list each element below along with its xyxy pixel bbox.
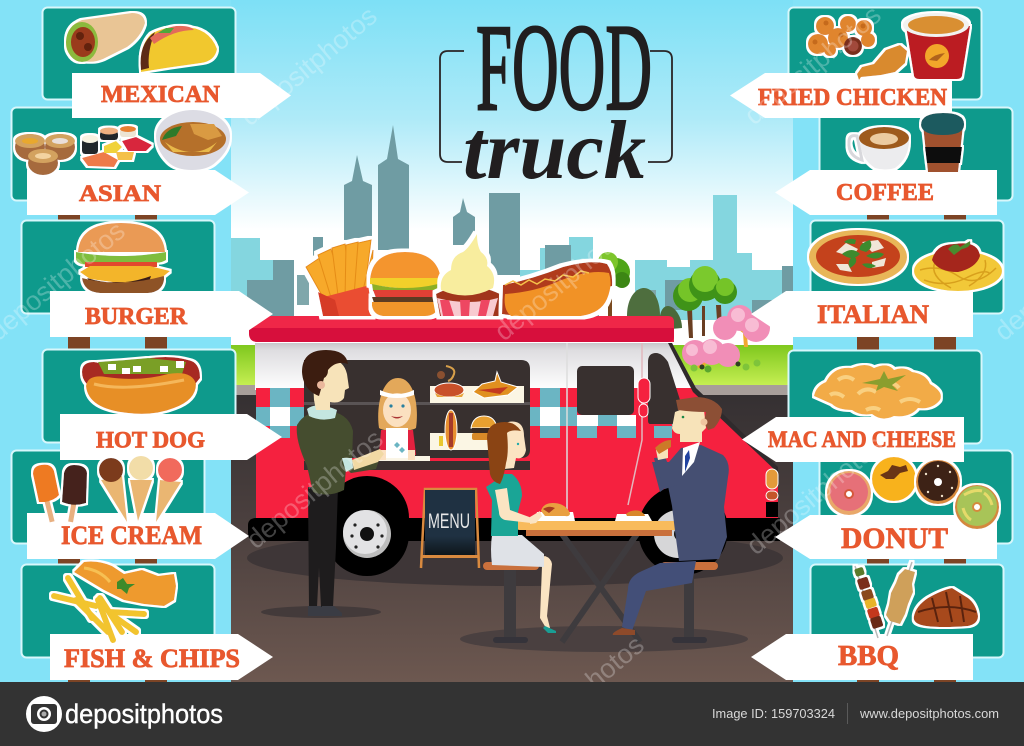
arrow: ice cream	[27, 513, 249, 559]
icon: drumstick	[857, 45, 907, 80]
food on truck roof	[306, 234, 612, 316]
shelf food top	[430, 366, 524, 403]
arrow: italian	[751, 291, 973, 337]
website: www.depositphotos.com	[859, 707, 999, 721]
man standing	[261, 350, 384, 618]
arrow: donut	[775, 515, 997, 559]
label: donut: DONUT	[841, 522, 948, 555]
food truck	[248, 316, 780, 576]
panel: fish and chips	[22, 564, 214, 658]
roof cupcake	[436, 234, 500, 316]
roof hot dog	[502, 262, 612, 316]
arrow: fried chicken	[730, 73, 952, 118]
arrow: burger	[50, 291, 273, 337]
label: fried chicken: FRIED CHICKEN	[758, 84, 947, 111]
ground: lawn, curb and road	[231, 335, 793, 683]
icon: pink donut	[827, 471, 871, 515]
icon: chicken bucket	[903, 13, 970, 79]
footer bar	[0, 682, 1024, 746]
arrow: fish and chips	[50, 634, 273, 680]
plates with food	[534, 503, 652, 521]
counter shelf	[304, 461, 530, 470]
icon: fish and chips	[54, 562, 176, 640]
side mirrors	[638, 378, 650, 403]
pink blossom trees	[682, 305, 770, 372]
title: food: FOOD	[476, 0, 652, 136]
shelf food bottom	[430, 410, 497, 450]
sign posts	[58, 215, 966, 683]
label: hot dog: HOT DOG	[96, 428, 205, 454]
truck red lower body	[256, 388, 778, 518]
panel: mac and cheese	[788, 350, 982, 444]
label: ice cream: ICE CREAM	[61, 521, 202, 550]
panel: coffee	[820, 108, 1012, 200]
watermark text: depositphotos	[741, 430, 889, 561]
icon: popsicles	[33, 465, 87, 522]
menu sign	[421, 489, 479, 568]
truck lights	[766, 469, 778, 517]
icon: dim sum, sushi and ramen	[15, 110, 230, 175]
door line	[566, 343, 568, 518]
icon: coffee cup	[849, 127, 909, 170]
label: italian: ITALIAN	[817, 300, 929, 329]
panel: ice cream	[12, 450, 204, 544]
icon: burger	[76, 223, 170, 293]
label: coffee: COFFEE	[836, 179, 934, 206]
icon: green donut	[955, 485, 999, 529]
trees behind truck	[598, 252, 737, 338]
panel: mexican	[42, 8, 236, 100]
icon: mac and cheese	[814, 365, 941, 419]
vendor girl	[378, 378, 417, 460]
title: truck: truck	[463, 104, 646, 197]
panel: donut	[820, 450, 1012, 544]
image id: Image ID: 159703324	[712, 707, 835, 721]
icon: steak	[914, 588, 978, 627]
icon: yellow donut	[872, 457, 916, 501]
arrow: coffee	[775, 170, 997, 215]
panel: bbq	[810, 564, 1004, 658]
city skyline	[231, 125, 793, 320]
label: burger: BURGER	[85, 303, 187, 330]
panel: burger	[22, 220, 214, 314]
icon: fried chicken nuggets	[808, 16, 875, 56]
arrow: mexican	[72, 73, 291, 118]
icon: meat skewer	[854, 566, 884, 638]
label: bbq: BBQ	[838, 641, 899, 672]
roof burger	[370, 252, 441, 316]
watermark text: depositphotos	[235, 1, 383, 132]
footer logo icon	[26, 696, 62, 732]
checker band	[256, 388, 686, 438]
label: fish and chips: FISH & CHIPS	[64, 644, 240, 673]
sky	[231, 0, 793, 262]
man seated eating	[613, 397, 729, 635]
icon: pizza	[809, 230, 907, 284]
watermark text: depositphotos	[241, 424, 389, 555]
icon: chicken skewer	[886, 562, 915, 636]
arrow: asian	[27, 170, 249, 215]
icon: ice cream cones	[99, 456, 182, 522]
arrow: bbq	[751, 634, 973, 680]
windshield	[648, 353, 680, 424]
arrow: mac and cheese	[742, 417, 964, 462]
icon: spaghetti	[914, 241, 1002, 291]
menu text: MENU	[428, 510, 470, 533]
table shadow	[460, 626, 748, 652]
watermark text: depositphotos	[739, 0, 887, 131]
woman seated	[486, 422, 556, 633]
bumper	[248, 518, 780, 541]
watermark text: depositphotos	[489, 216, 637, 347]
right wheel	[638, 485, 728, 575]
icon: hot dog	[82, 357, 200, 414]
truck shadow	[247, 530, 783, 586]
roof fries	[306, 240, 374, 316]
label: mexican: MEXICAN	[101, 81, 220, 108]
side window	[577, 366, 634, 415]
panel: hot dog	[42, 350, 236, 442]
title bracket	[440, 51, 672, 162]
panel: italian	[810, 220, 1004, 314]
label: mac and cheese: MAC AND CHEESE	[768, 427, 956, 452]
icon: chocolate donut	[916, 460, 960, 504]
panel: asian	[12, 108, 204, 200]
table with stools	[483, 521, 718, 643]
label: asian: ASIAN	[79, 181, 161, 206]
service window	[304, 360, 530, 458]
roof	[249, 316, 674, 342]
left wheel	[325, 476, 409, 576]
footer logo text: depositphotos	[65, 699, 223, 729]
panel: fried chicken	[788, 8, 982, 100]
title	[440, 0, 672, 197]
icon: takeaway coffee	[921, 113, 964, 172]
arrow: hot dog	[60, 414, 282, 460]
truck upper body	[255, 343, 696, 390]
icon: burrito and taco	[66, 13, 217, 72]
hood outline	[668, 343, 778, 473]
